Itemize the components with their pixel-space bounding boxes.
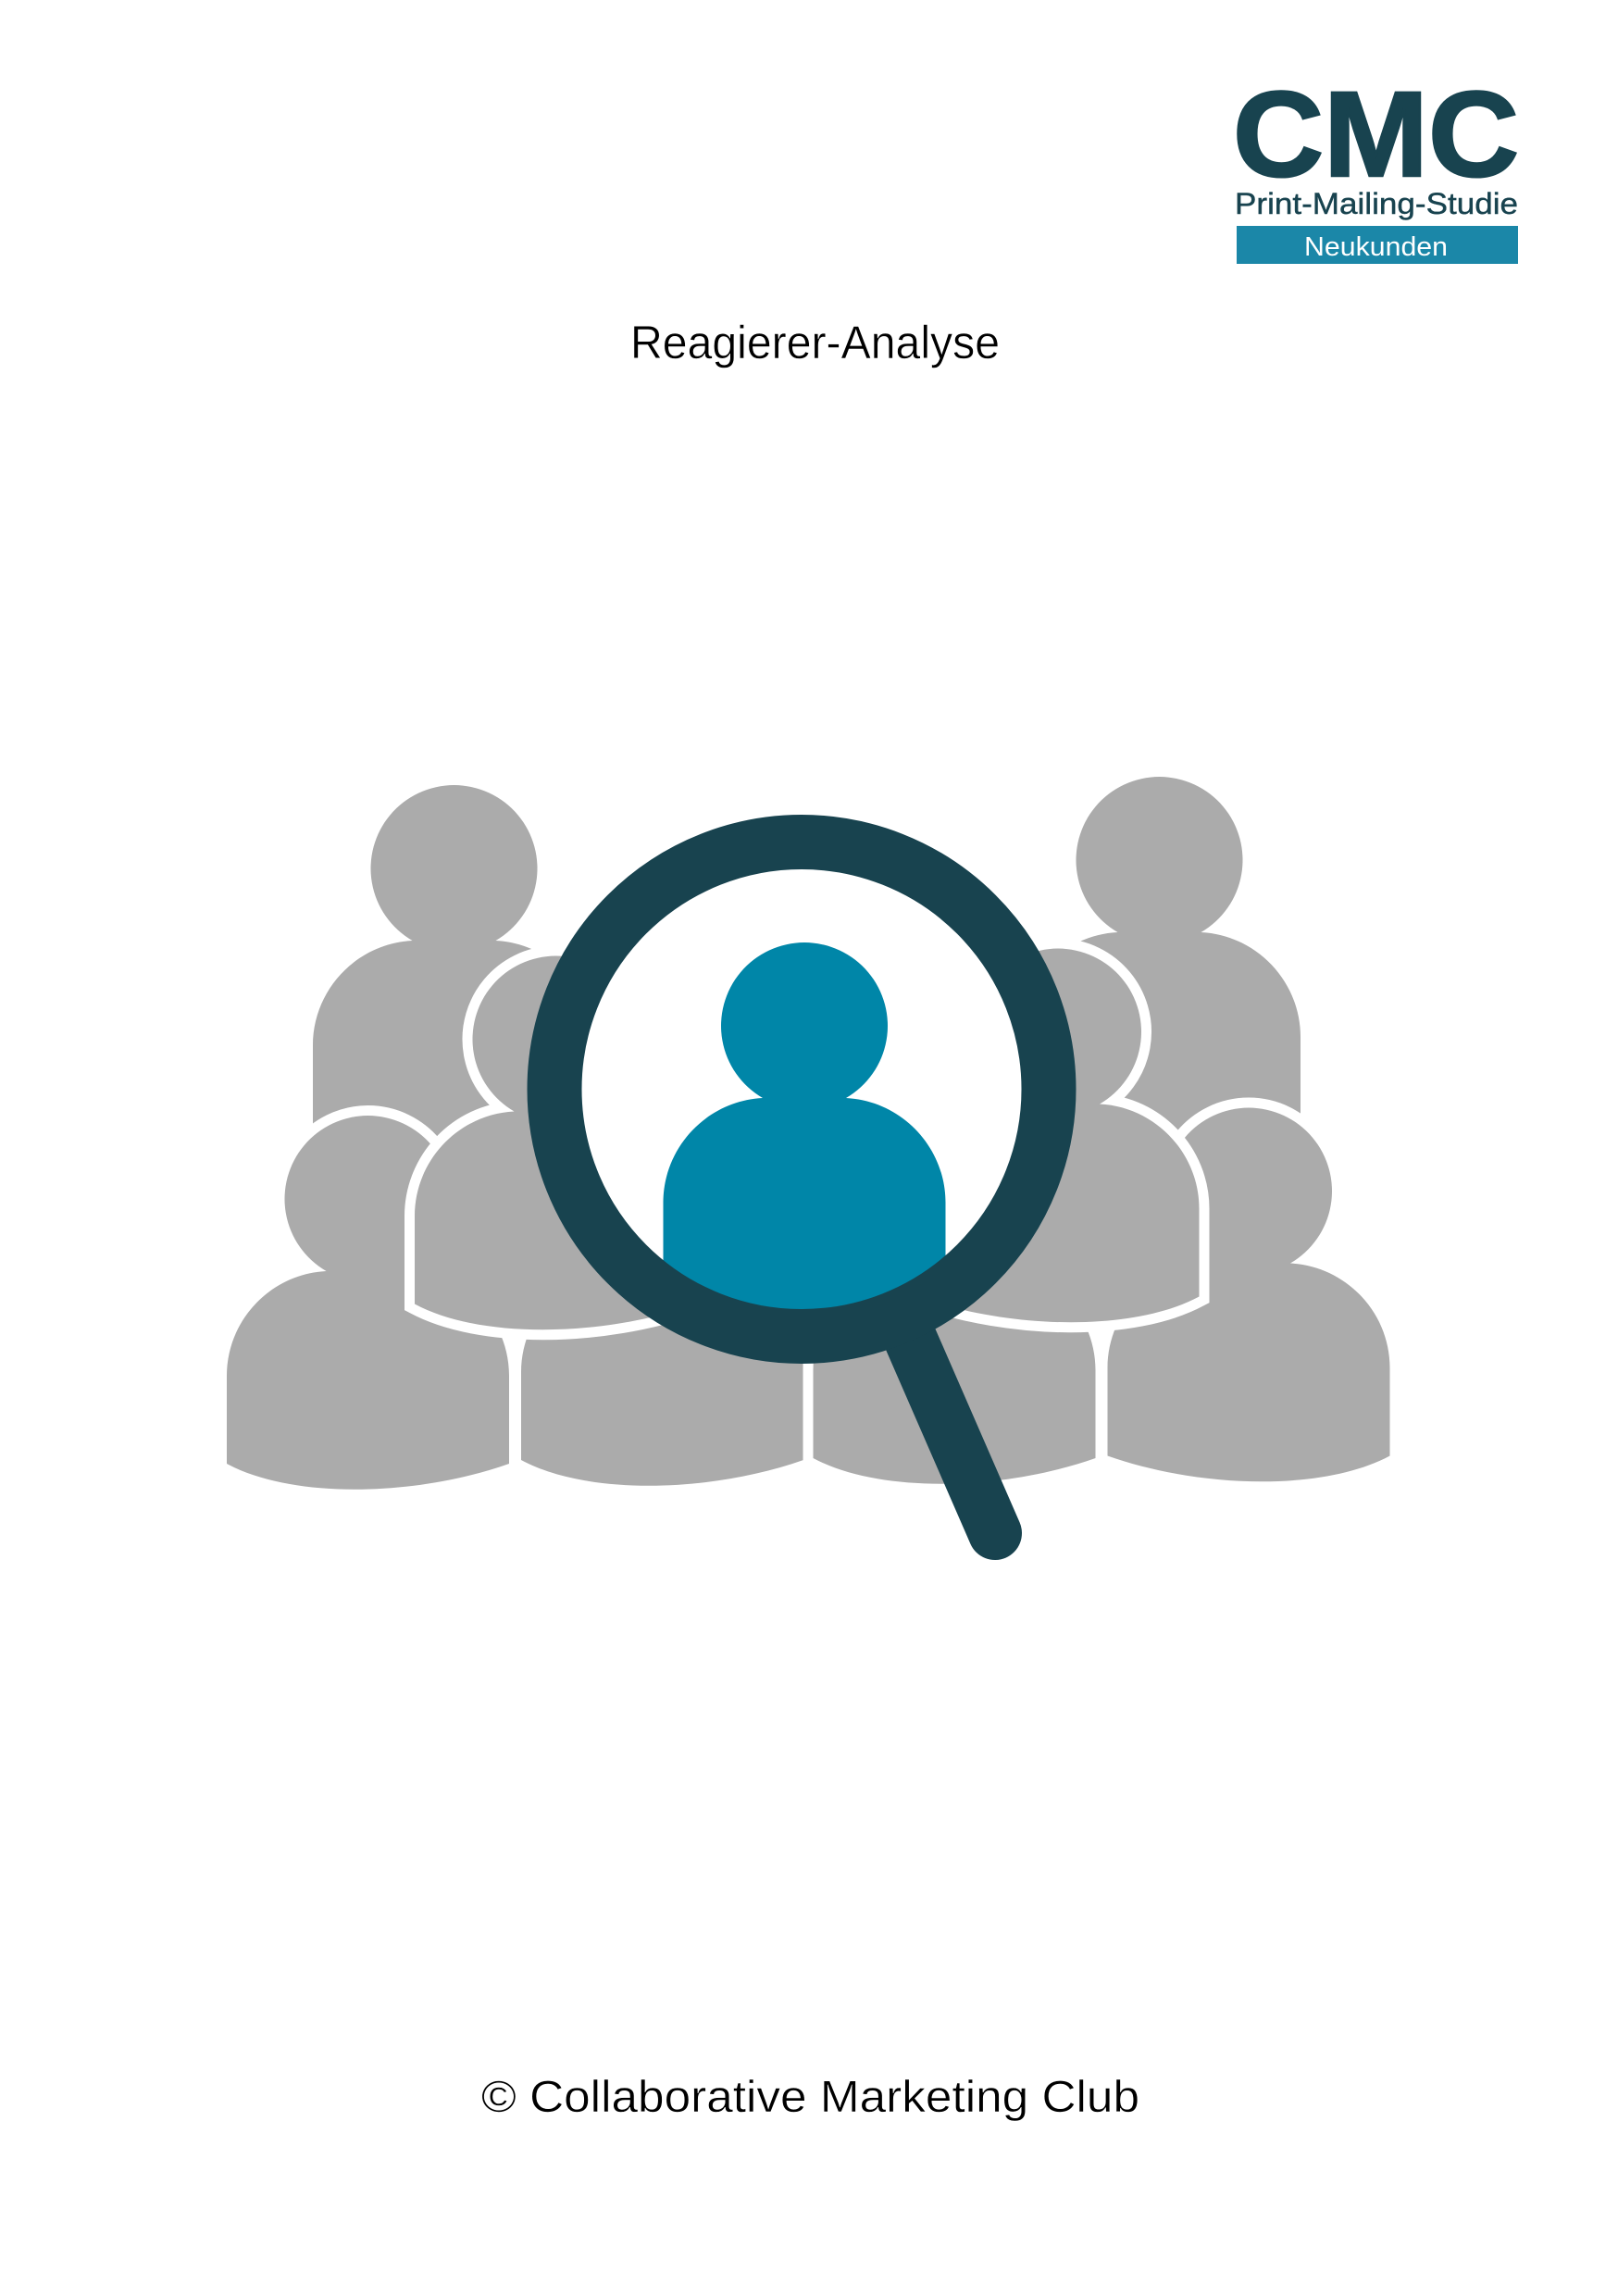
person: front row second bbox=[521, 1112, 803, 1486]
person: middle right bbox=[916, 949, 1200, 1322]
magnifier lens background bbox=[579, 867, 1024, 1311]
logo badge bar bbox=[1237, 226, 1518, 264]
person: back left bbox=[313, 785, 595, 1159]
copyright footer: © Collaborative Marketing Club bbox=[481, 2073, 1139, 2122]
magnifier handle bbox=[891, 1295, 995, 1533]
person: front row third bbox=[813, 1110, 1096, 1484]
magnifier ring bbox=[554, 842, 1049, 1337]
logo: CMC Print-Mailing-Studie Neukunden bbox=[1233, 66, 1519, 264]
logo wordmark CMC: CMC bbox=[1233, 66, 1519, 202]
person: front row far right bbox=[1107, 1108, 1390, 1481]
highlighted person in lens bbox=[663, 942, 946, 1333]
illustration: crowd of people under magnifying glass bbox=[227, 777, 1390, 1533]
title: Reagierer-Analyse bbox=[630, 317, 1000, 368]
person: back right bbox=[1018, 777, 1301, 1151]
person: front row far left bbox=[227, 1116, 509, 1490]
person: middle left bbox=[415, 956, 697, 1329]
logo subtitle: Print-Mailing-Studie bbox=[1235, 187, 1518, 220]
logo badge label: Neukunden bbox=[1304, 232, 1448, 262]
